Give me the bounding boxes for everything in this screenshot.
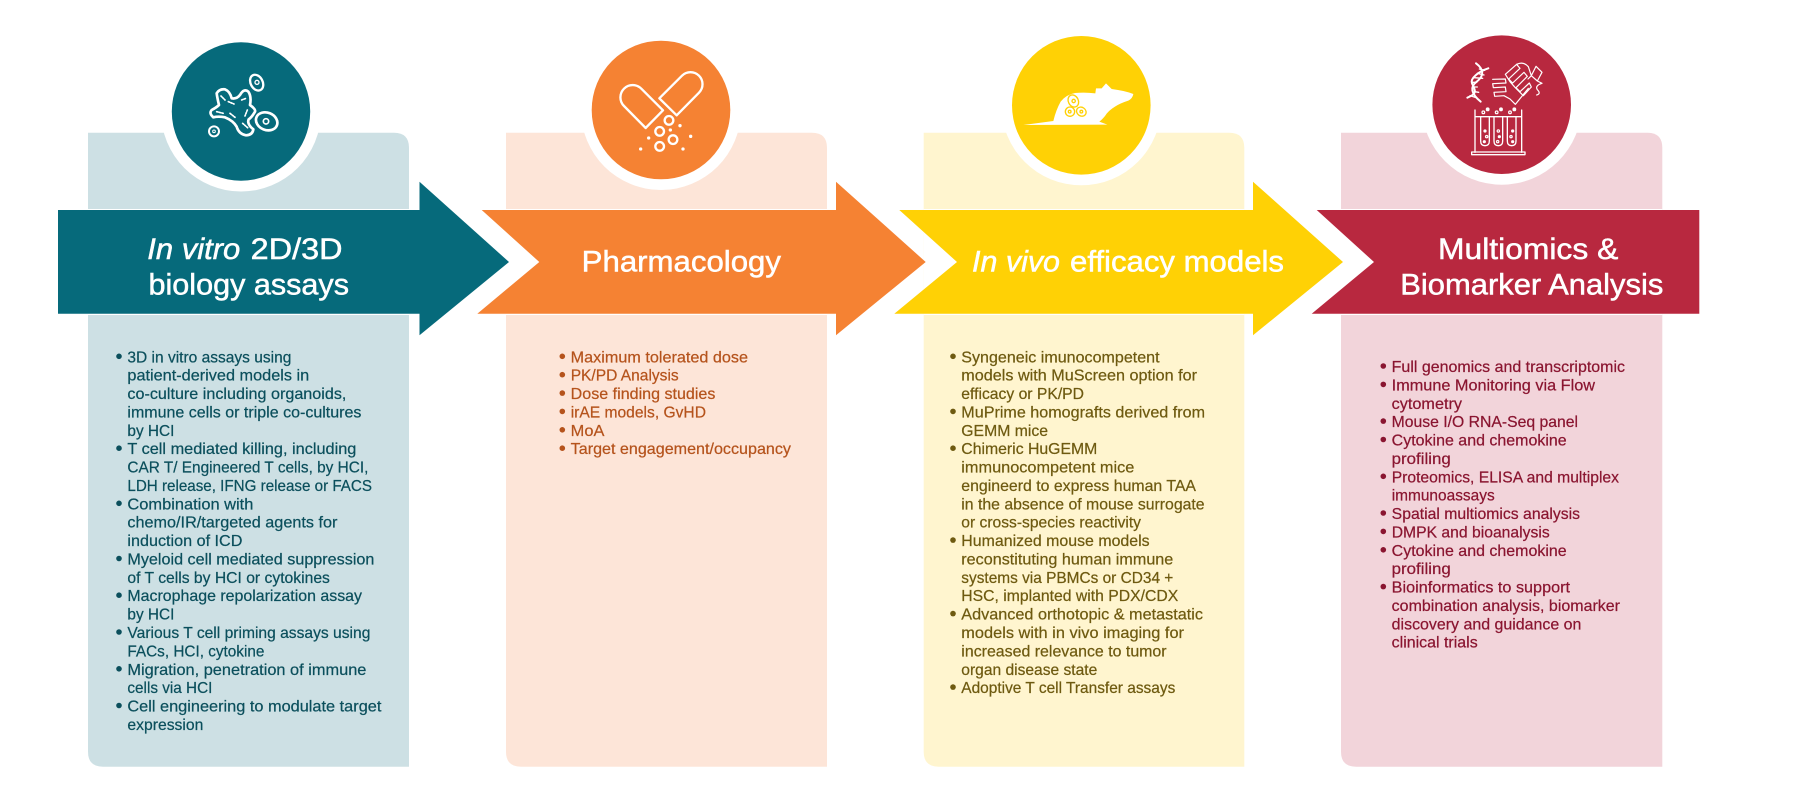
list: in vivo models: reconstituting human immune — [961, 552, 1173, 568]
icon: mouse — [1012, 36, 1151, 175]
arrow: in vitro heading: 2D/3D — [251, 233, 342, 266]
list: multiomics: combination analysis, biomarker — [1392, 598, 1620, 615]
list: in vivo models: increased relevance to tumor — [961, 643, 1167, 660]
list: pharmacology: PK/PD Analysis — [571, 368, 679, 385]
list: multiomics: Cytokine and chemokine — [1392, 432, 1567, 450]
arrow: pharmacology heading: Pharmacology — [582, 246, 781, 279]
icon: cells — [172, 42, 310, 181]
list: in vitro assays: induction of ICD — [127, 533, 242, 550]
list: multiomics: Immune Monitoring via Flow — [1392, 377, 1596, 394]
list: multiomics: immunoassays — [1392, 488, 1495, 505]
list: in vitro assays: of T cells by HCI or cytokines — [127, 570, 330, 587]
list: in vivo models: models with in vivo imaging for — [961, 625, 1184, 642]
list: in vivo models: engineerd to express human TAA — [961, 478, 1197, 495]
list: in vitro assays: 3D in vitro assays using — [127, 349, 291, 366]
list: in vitro assays — [116, 349, 382, 734]
list: multiomics: DMPK and bioanalysis — [1392, 524, 1550, 541]
list: multiomics: Spatial multiomics analysis — [1392, 506, 1580, 523]
list: in vivo models: Chimeric HuGEMM — [961, 441, 1097, 458]
list: in vivo models: in the absence of mouse surrogate — [961, 496, 1205, 513]
list: multiomics: Proteomics, ELISA and multiplex — [1392, 469, 1619, 486]
list: in vitro assays: patient-derived models in — [127, 368, 309, 385]
panel: in vitro assays — [88, 32, 409, 767]
list: pharmacology: irAE models, GvHD — [571, 404, 706, 421]
list: multiomics: profiling — [1392, 451, 1451, 468]
list: in vivo models: Adoptive T cell Transfer assays — [961, 680, 1175, 697]
arrow: multiomics heading: Multiomics & — [1438, 233, 1618, 266]
icon: DNA, protein and test tubes — [1432, 35, 1571, 174]
list: in vitro assays: FACs, HCI, cytokine — [127, 643, 264, 660]
list: pharmacology: Target engagement/occupancy — [571, 441, 791, 458]
list: multiomics: profiling — [1392, 561, 1451, 578]
arrow: in vitro heading — [58, 182, 509, 335]
list: in vitro assays: expression — [127, 717, 203, 734]
list: in vitro assays: by HCI — [127, 423, 174, 440]
icon: capsule — [592, 41, 730, 179]
list: in vitro assays: Combination with — [127, 496, 253, 513]
list: in vitro assays: chemo/IR/targeted agents for — [127, 515, 337, 532]
list: in vivo models: systems via PBMCs or CD34 + — [961, 570, 1173, 587]
list: in vivo models: or cross-species reactivity — [961, 515, 1141, 532]
list: in vitro assays: Cell engineering to modulate target — [127, 698, 382, 716]
list: in vitro assays: CAR T/ Engineered T cells, by HCI, — [127, 460, 368, 477]
arrow: in vivo heading: efficacy models — [1070, 246, 1284, 279]
list: multiomics — [1380, 359, 1625, 652]
list: in vivo models: organ disease state — [961, 662, 1097, 679]
list: multiomics: cytometry — [1392, 396, 1462, 413]
list: in vivo models: Advanced orthotopic & metastatic — [961, 607, 1203, 624]
list: pharmacology — [560, 349, 791, 458]
list: pharmacology: MoA — [571, 423, 605, 440]
list: in vitro assays: Various T cell priming assays using — [127, 625, 370, 642]
list: in vitro assays: LDH release, IFNG release or FACS — [127, 478, 372, 495]
list: in vitro assays: Migration, penetration of immune — [127, 662, 366, 679]
panel: pharmacology — [506, 30, 827, 767]
list: in vivo models: GEMM mice — [961, 423, 1048, 440]
arrow: in vitro heading: In vitro — [147, 233, 240, 266]
list: in vivo models: HSC, implanted with PDX/CDX — [961, 588, 1179, 605]
list: in vivo models: Humanized mouse models — [961, 533, 1150, 550]
arrow: in vivo heading — [894, 182, 1343, 335]
panel: in vivo models — [924, 25, 1244, 767]
list: in vitro assays: T cell mediated killing, including — [127, 441, 356, 458]
list: in vitro assays: by HCI — [127, 607, 174, 624]
list: multiomics: Mouse I/O RNA-Seq panel — [1392, 414, 1578, 431]
list: in vivo models: immunocompetent mice — [961, 460, 1134, 477]
arrow: multiomics heading — [1312, 210, 1699, 314]
list: multiomics: clinical trials — [1392, 635, 1478, 652]
list: in vivo models: efficacy or PK/PD — [961, 386, 1084, 403]
list: multiomics: Full genomics and transcriptomic — [1392, 359, 1625, 376]
list: multiomics: discovery and guidance on — [1392, 616, 1581, 633]
list: in vivo models: Syngeneic imunocompetent — [961, 349, 1160, 366]
arrow: pharmacology heading — [477, 182, 926, 335]
list: in vitro assays: Macrophage repolarization assay — [127, 588, 362, 605]
list: in vitro assays: Myeloid cell mediated suppression — [127, 552, 374, 568]
list: pharmacology: Dose finding studies — [571, 386, 716, 403]
list: multiomics: Cytokine and chemokine — [1392, 543, 1567, 560]
arrow: in vivo heading: In vivo — [972, 246, 1060, 279]
panel: multiomics — [1341, 25, 1662, 767]
arrow: multiomics heading: Biomarker Analysis — [1400, 269, 1663, 302]
list: in vivo models: MuPrime homografts derived from — [961, 404, 1205, 421]
list: pharmacology: Maximum tolerated dose — [571, 349, 748, 366]
list: in vitro assays: co-culture including organoids, — [127, 386, 346, 403]
list: in vitro assays: immune cells or triple co-cultures — [127, 404, 362, 421]
list: in vivo models — [950, 349, 1205, 697]
list: in vitro assays: cells via HCI — [127, 680, 212, 697]
list: in vivo models: models with MuScreen option for — [961, 368, 1197, 385]
arrow: in vitro heading: biology assays — [148, 269, 349, 302]
list: multiomics: Bioinformatics to support — [1392, 580, 1571, 597]
